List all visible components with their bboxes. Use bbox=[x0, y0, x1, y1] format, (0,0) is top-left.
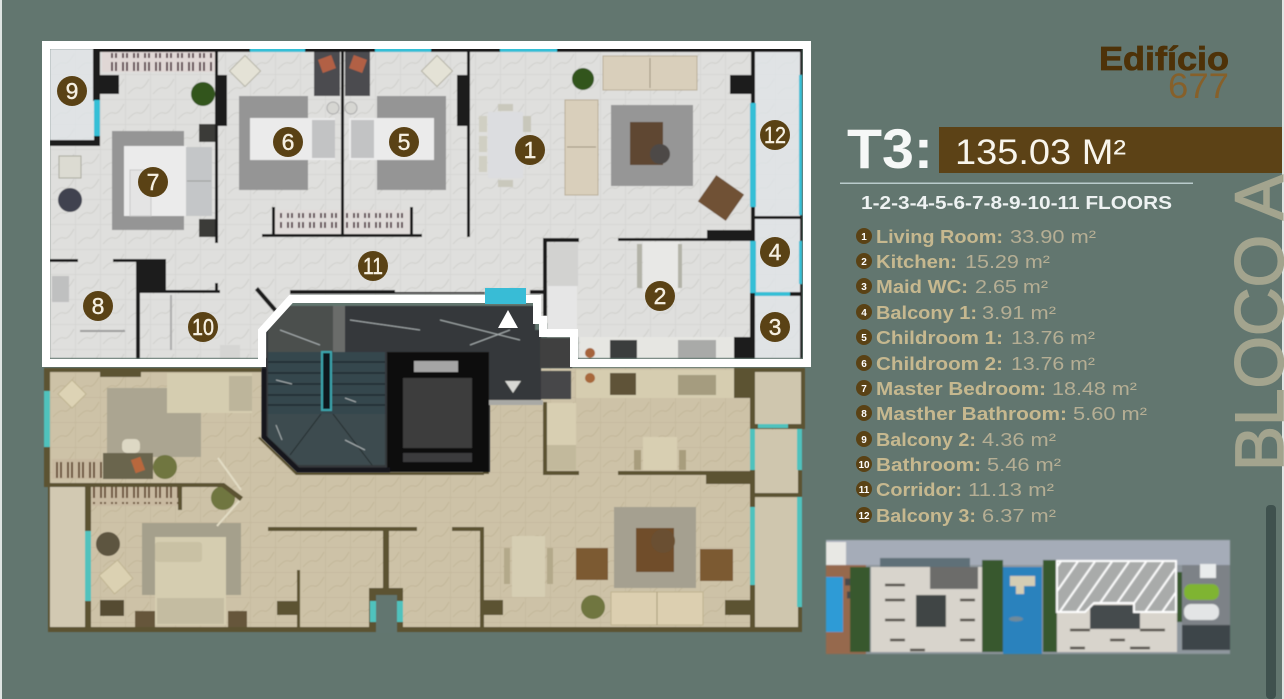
legend row 9: 9 bbox=[861, 435, 867, 446]
legend row 7: 18.48 m² bbox=[1052, 379, 1137, 399]
upper floor bbox=[50, 49, 802, 358]
legend row 7 bbox=[856, 379, 1137, 399]
area bar bbox=[939, 127, 1282, 173]
legend row 3: 3 bbox=[861, 282, 867, 293]
white unit outline bbox=[46, 45, 807, 363]
master bedroom furniture bbox=[58, 52, 216, 237]
upper windows bbox=[94, 48, 802, 296]
childroom 2 furniture bbox=[229, 50, 340, 190]
lower living room furniture bbox=[504, 507, 733, 625]
children wardrobe bbox=[275, 210, 410, 234]
badge 6: 6 bbox=[282, 129, 294, 155]
badge 2 bbox=[645, 281, 675, 311]
core outer black edge bbox=[264, 368, 390, 470]
stairs bbox=[268, 306, 520, 465]
legend row 1 bbox=[856, 227, 1096, 247]
entry door marker bbox=[485, 288, 526, 304]
legend row 9 bbox=[856, 430, 1056, 450]
badge 1 bbox=[515, 135, 545, 165]
logo name: Edifício bbox=[1099, 40, 1229, 77]
legend row 9: Balcony 2: bbox=[876, 430, 976, 450]
badge 8: 8 bbox=[92, 293, 104, 319]
legend row 2: 15.29 m² bbox=[965, 252, 1050, 272]
upper walls bbox=[50, 48, 802, 358]
legend row 7: 7 bbox=[861, 384, 867, 395]
site key plan thumbnail bbox=[826, 540, 1230, 654]
badge 7 bbox=[138, 167, 168, 197]
legend row 10: Bathroom: bbox=[876, 455, 981, 475]
left building bbox=[871, 558, 982, 652]
badge 5: 5 bbox=[398, 129, 410, 155]
badge 1: 1 bbox=[524, 137, 536, 163]
legend row 12: 12 bbox=[858, 511, 870, 522]
legend row 2: Kitchen: bbox=[876, 252, 957, 272]
legend row 3: Maid WC: bbox=[876, 277, 968, 297]
legend row 4 bbox=[856, 303, 1056, 323]
badge 7: 7 bbox=[147, 169, 159, 195]
badge 11 bbox=[358, 251, 388, 281]
legend row 11 bbox=[856, 480, 1054, 500]
down arrow bbox=[505, 381, 521, 393]
legend row 1: 33.90 m² bbox=[1010, 227, 1096, 247]
divider bbox=[840, 182, 1193, 184]
badge 8 bbox=[83, 291, 113, 321]
dining table bbox=[479, 104, 531, 187]
legend row 3: 2.65 m² bbox=[975, 277, 1048, 297]
badge 9 bbox=[57, 76, 87, 106]
badge 11: 11 bbox=[363, 253, 383, 279]
badge 3 bbox=[760, 312, 790, 342]
highlighted unit hatch bbox=[1057, 561, 1176, 612]
legend row 5 bbox=[856, 328, 1095, 348]
lower unit floor plan (sepia) bbox=[44, 368, 805, 632]
legend row 10: 5.46 m² bbox=[987, 455, 1061, 475]
area value: 135.03 M² bbox=[955, 133, 1126, 172]
lower left balcony bbox=[50, 487, 86, 628]
legend row 11: Corridor: bbox=[876, 480, 962, 500]
legend row 3 bbox=[856, 277, 1048, 297]
legend row 9: 4.36 m² bbox=[982, 430, 1056, 450]
lower bedroom top: rug, bed, chair bbox=[58, 373, 252, 457]
lower windows bbox=[44, 391, 802, 622]
hedges bbox=[850, 560, 1182, 652]
pool deck and pool bbox=[826, 542, 866, 654]
legend row 8: Masther Bathroom: bbox=[876, 404, 1067, 424]
badge 9: 9 bbox=[66, 78, 78, 104]
lower walls bbox=[44, 368, 805, 632]
legend row 11: 11.13 m² bbox=[968, 480, 1054, 500]
childroom 1 furniture bbox=[345, 50, 453, 190]
right building bbox=[1057, 561, 1177, 652]
stair rail bbox=[322, 352, 331, 410]
legend row 1: 1 bbox=[861, 232, 867, 243]
legend row 10 bbox=[856, 455, 1061, 475]
lower notch bbox=[376, 595, 397, 632]
site ground bbox=[826, 540, 1230, 654]
legend row 4: 4 bbox=[861, 308, 867, 319]
legend row 1: Living Room: bbox=[876, 227, 1003, 247]
lower kitchen bbox=[547, 370, 734, 470]
room area legend bbox=[856, 227, 1147, 526]
legend row 8: 5.60 m² bbox=[1073, 404, 1147, 424]
badge 4: 4 bbox=[769, 239, 782, 265]
central stair and elevator core bbox=[262, 306, 572, 472]
legend row 6 bbox=[856, 354, 1095, 374]
legend row 8 bbox=[856, 404, 1147, 424]
balconies bbox=[50, 49, 800, 358]
legend row 10: 10 bbox=[858, 460, 870, 471]
legend row 6: 13.76 m² bbox=[1011, 354, 1095, 374]
living room furniture bbox=[565, 56, 744, 221]
legend row 11: 11 bbox=[859, 485, 870, 496]
up arrow bbox=[498, 310, 518, 328]
legend row 12: 6.37 m² bbox=[982, 506, 1056, 526]
scrollbar bbox=[1266, 505, 1276, 699]
badge 5 bbox=[389, 127, 419, 157]
legend row 8: 8 bbox=[861, 409, 867, 420]
badge 6 bbox=[273, 127, 303, 157]
badge 2: 2 bbox=[654, 283, 666, 309]
legend row 6: 6 bbox=[861, 359, 867, 370]
parking and cars bbox=[1182, 564, 1230, 650]
badge 10: 10 bbox=[192, 314, 214, 340]
legend row 12 bbox=[856, 506, 1056, 526]
legend row 4: 3.91 m² bbox=[982, 303, 1056, 323]
core dark marble bbox=[262, 306, 541, 472]
lower wardrobe and desk top bbox=[52, 453, 177, 479]
floors line: 1-2-3-4-5-6-7-8-9-10-11 FLOORS bbox=[861, 193, 1172, 213]
kitchen furniture bbox=[548, 242, 734, 358]
badge 3: 3 bbox=[769, 314, 781, 340]
elevator bbox=[387, 352, 489, 472]
bathroom fixtures bbox=[52, 276, 240, 358]
badge 4 bbox=[760, 237, 790, 267]
legend row 12: Balcony 3: bbox=[876, 506, 976, 526]
legend row 5: 13.76 m² bbox=[1011, 328, 1095, 348]
legend row 2: 2 bbox=[861, 257, 867, 268]
building logo bbox=[1099, 40, 1229, 106]
badge 12: 12 bbox=[764, 122, 786, 148]
legend row 5: 5 bbox=[861, 333, 867, 344]
service boxes bbox=[489, 338, 572, 405]
legend row 4: Balcony 1: bbox=[876, 303, 977, 323]
legend row 5: Childroom 1: bbox=[876, 328, 1003, 348]
legend row 6: Childroom 2: bbox=[876, 354, 1003, 374]
legend row 2 bbox=[856, 252, 1050, 272]
T3 label: T3: bbox=[847, 117, 933, 180]
central courtyard bbox=[1003, 567, 1042, 654]
logo number: 677 bbox=[1168, 67, 1229, 106]
room number badges bbox=[57, 76, 790, 342]
lower right balconies bbox=[755, 372, 802, 628]
upper unit floor plan (highlighted) bbox=[50, 48, 802, 358]
unit type heading bbox=[847, 117, 1282, 180]
lower unit floor bbox=[44, 368, 805, 632]
legend row 7: Master Bedroom: bbox=[876, 379, 1046, 399]
lower master bedroom bbox=[92, 458, 247, 627]
